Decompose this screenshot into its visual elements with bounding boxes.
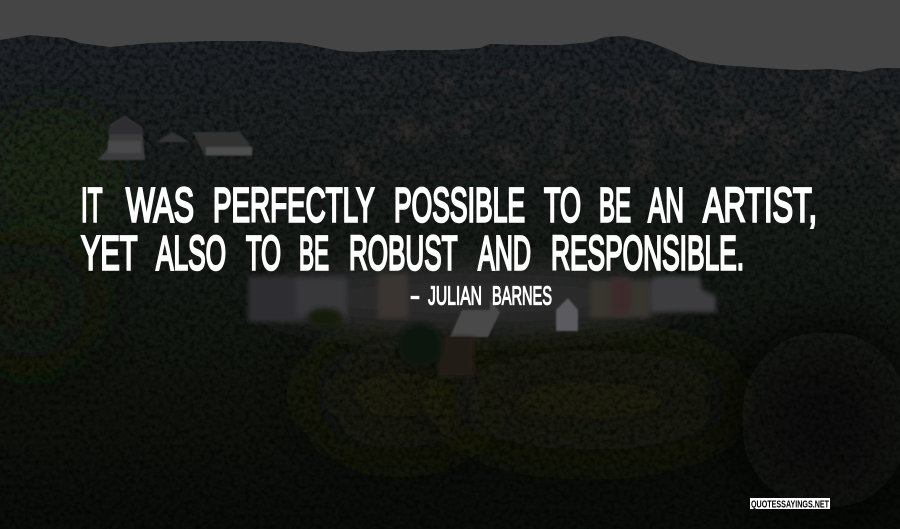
author attribution: - — [410, 280, 420, 310]
quote line 2: TO — [246, 228, 281, 280]
watermark badge: QUOTESSAYINGS.NET — [751, 500, 829, 510]
quote line 2: ALSO — [156, 228, 226, 280]
quote line 1: ARTIST, — [703, 180, 817, 232]
quote text — [81, 180, 817, 280]
quote line 1: POSSIBLE — [394, 180, 525, 232]
quote line 1: TO — [544, 180, 581, 232]
quote line 2: ROBUST — [349, 228, 457, 280]
quote line 2: AND — [478, 228, 531, 280]
author attribution: BARNES — [492, 280, 552, 310]
quote line 1: PERFECTLY — [213, 180, 374, 232]
background: village in the valley — [248, 264, 716, 377]
quote line 2: BE — [299, 228, 329, 280]
quote line 1: IT — [81, 180, 102, 232]
watermark badge — [750, 498, 830, 510]
quote line 1: WAS — [126, 180, 194, 232]
author attribution: JULIAN — [428, 280, 482, 310]
quote line 1: AN — [648, 180, 684, 232]
background: hillside houses — [98, 116, 252, 160]
quote line 2: RESPONSIBLE. — [551, 228, 744, 280]
quote line 1: BE — [599, 180, 631, 232]
quote line 2: YET — [81, 228, 137, 280]
